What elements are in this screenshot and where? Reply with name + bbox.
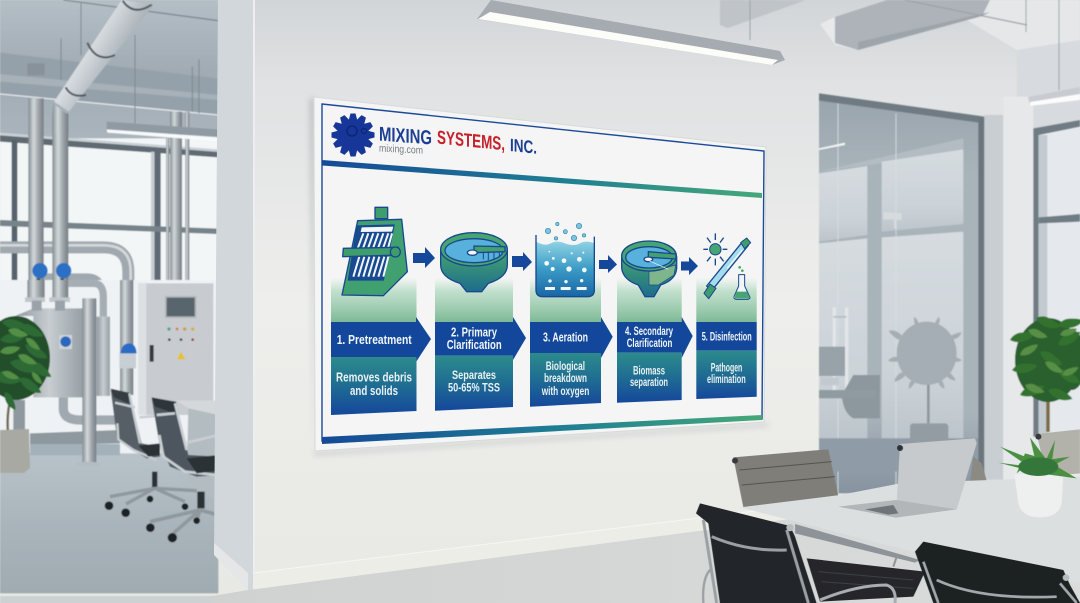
office chair, rear bbox=[105, 389, 197, 517]
icon: primary clarifier bbox=[441, 233, 507, 292]
door reveal bbox=[984, 115, 1003, 480]
control cabinet bbox=[138, 283, 213, 415]
footer band bbox=[322, 415, 762, 444]
glass door bbox=[819, 93, 984, 493]
left potted plant bbox=[0, 316, 54, 473]
step title: Clarification bbox=[627, 336, 672, 350]
right window bbox=[1033, 120, 1080, 480]
laptop bbox=[838, 438, 977, 518]
step title: 2. Primary bbox=[451, 326, 497, 340]
header arrow bbox=[331, 317, 431, 362]
right floor bbox=[200, 490, 1080, 603]
step description: and solids bbox=[350, 384, 398, 398]
step description: Biological bbox=[546, 359, 585, 373]
lighter floor strip bbox=[0, 596, 260, 603]
poster border bbox=[322, 104, 764, 441]
step description: Separates bbox=[452, 368, 496, 382]
logo: company name: INC. bbox=[510, 135, 537, 158]
step title: Clarification bbox=[447, 338, 502, 352]
diagonal air duct bbox=[52, 0, 154, 133]
step description: Biomass bbox=[633, 365, 665, 377]
blue valve heads bbox=[32, 263, 71, 295]
office chair, front bbox=[146, 397, 218, 542]
step 3 panel: aeration bbox=[530, 222, 613, 407]
step description: separation bbox=[630, 377, 668, 389]
step 1 panel: pretreatment bbox=[331, 207, 431, 415]
conference table area bbox=[696, 429, 1080, 603]
header divider band bbox=[322, 160, 762, 198]
ceiling elements bbox=[720, 0, 1080, 130]
step title bbox=[447, 326, 502, 352]
horizontal process pipes bbox=[0, 245, 131, 300]
right potted plant bbox=[1009, 314, 1080, 432]
step description: elimination bbox=[707, 374, 746, 386]
white pot plant bbox=[998, 437, 1077, 517]
body bbox=[331, 357, 416, 415]
riser pipes upper bbox=[27, 280, 133, 395]
poster board bbox=[314, 97, 766, 451]
arrow 3 bbox=[599, 255, 617, 273]
step title: 5. Disinfection bbox=[702, 330, 752, 344]
step description bbox=[541, 359, 589, 398]
black chair, right bbox=[915, 542, 1080, 603]
right side room, glass door and window bbox=[720, 0, 1080, 505]
arrow 4 bbox=[681, 257, 698, 275]
logo: company name: MIXING bbox=[379, 124, 432, 149]
baseboard bbox=[248, 503, 820, 590]
step title: 4. Secondary bbox=[625, 324, 673, 338]
pillar side bbox=[214, 0, 253, 590]
reflected plant bbox=[887, 316, 963, 443]
lower window backdrop bbox=[0, 280, 218, 457]
logo: gear icon bbox=[332, 114, 374, 156]
ceiling beams bbox=[0, 0, 218, 123]
step description: breakdown bbox=[544, 371, 587, 385]
logo: website: mixing.com bbox=[379, 143, 423, 157]
door frame bbox=[819, 93, 984, 505]
arrow 2 bbox=[512, 252, 532, 271]
step 5 panel: disinfection bbox=[696, 233, 757, 399]
logo: company name bbox=[379, 124, 537, 158]
step description bbox=[448, 368, 500, 395]
ceiling light fixture over poster bbox=[477, 0, 785, 65]
icon: UV disinfection bbox=[703, 233, 751, 299]
window frame bbox=[0, 133, 218, 307]
chair right edge bbox=[1035, 429, 1080, 477]
step title: 1. Pretreatment bbox=[337, 332, 412, 347]
arrow 1 bbox=[413, 247, 435, 268]
right wall segment bbox=[1003, 97, 1033, 480]
step title bbox=[625, 324, 673, 350]
vertical steel columns bbox=[166, 112, 189, 285]
step description bbox=[630, 365, 668, 389]
vertical riser pipes bbox=[28, 98, 68, 300]
icon: bar screen bbox=[342, 207, 407, 296]
step description bbox=[707, 363, 746, 386]
icon: secondary clarifier bbox=[622, 241, 677, 297]
step description: Pathogen bbox=[711, 363, 742, 375]
industrial room seen on the left bbox=[0, 0, 260, 603]
stainless mixing tank bbox=[15, 297, 120, 420]
blue valve bbox=[119, 343, 137, 368]
window sill bbox=[13, 400, 120, 455]
black chair, left bbox=[696, 503, 925, 603]
step description: Removes debris bbox=[336, 371, 412, 385]
light fixture, left room bbox=[107, 122, 218, 141]
poster bbox=[314, 97, 766, 451]
logo: company name: SYSTEMS, bbox=[437, 128, 505, 155]
tall steel pipe bbox=[77, 298, 101, 466]
grey chair at table bbox=[732, 449, 838, 507]
window glass bbox=[0, 138, 218, 497]
step 2 panel: primary clarification bbox=[435, 233, 526, 411]
desk behind chairs bbox=[177, 401, 218, 500]
ceiling bbox=[0, 0, 218, 143]
fade column bbox=[331, 278, 416, 322]
step description: 50-65% TSS bbox=[448, 381, 500, 395]
poster drop shadow bbox=[310, 97, 770, 455]
grey chair behind laptop bbox=[970, 457, 987, 482]
step description: with oxygen bbox=[541, 384, 589, 398]
step title: 3. Aeration bbox=[543, 331, 588, 345]
ceiling light, right bbox=[1028, 87, 1080, 106]
floor bbox=[0, 453, 218, 593]
step description bbox=[336, 371, 412, 398]
icon: aeration basin bbox=[536, 222, 594, 297]
step 4 panel: secondary clarification bbox=[617, 241, 693, 403]
table bbox=[740, 477, 1080, 583]
